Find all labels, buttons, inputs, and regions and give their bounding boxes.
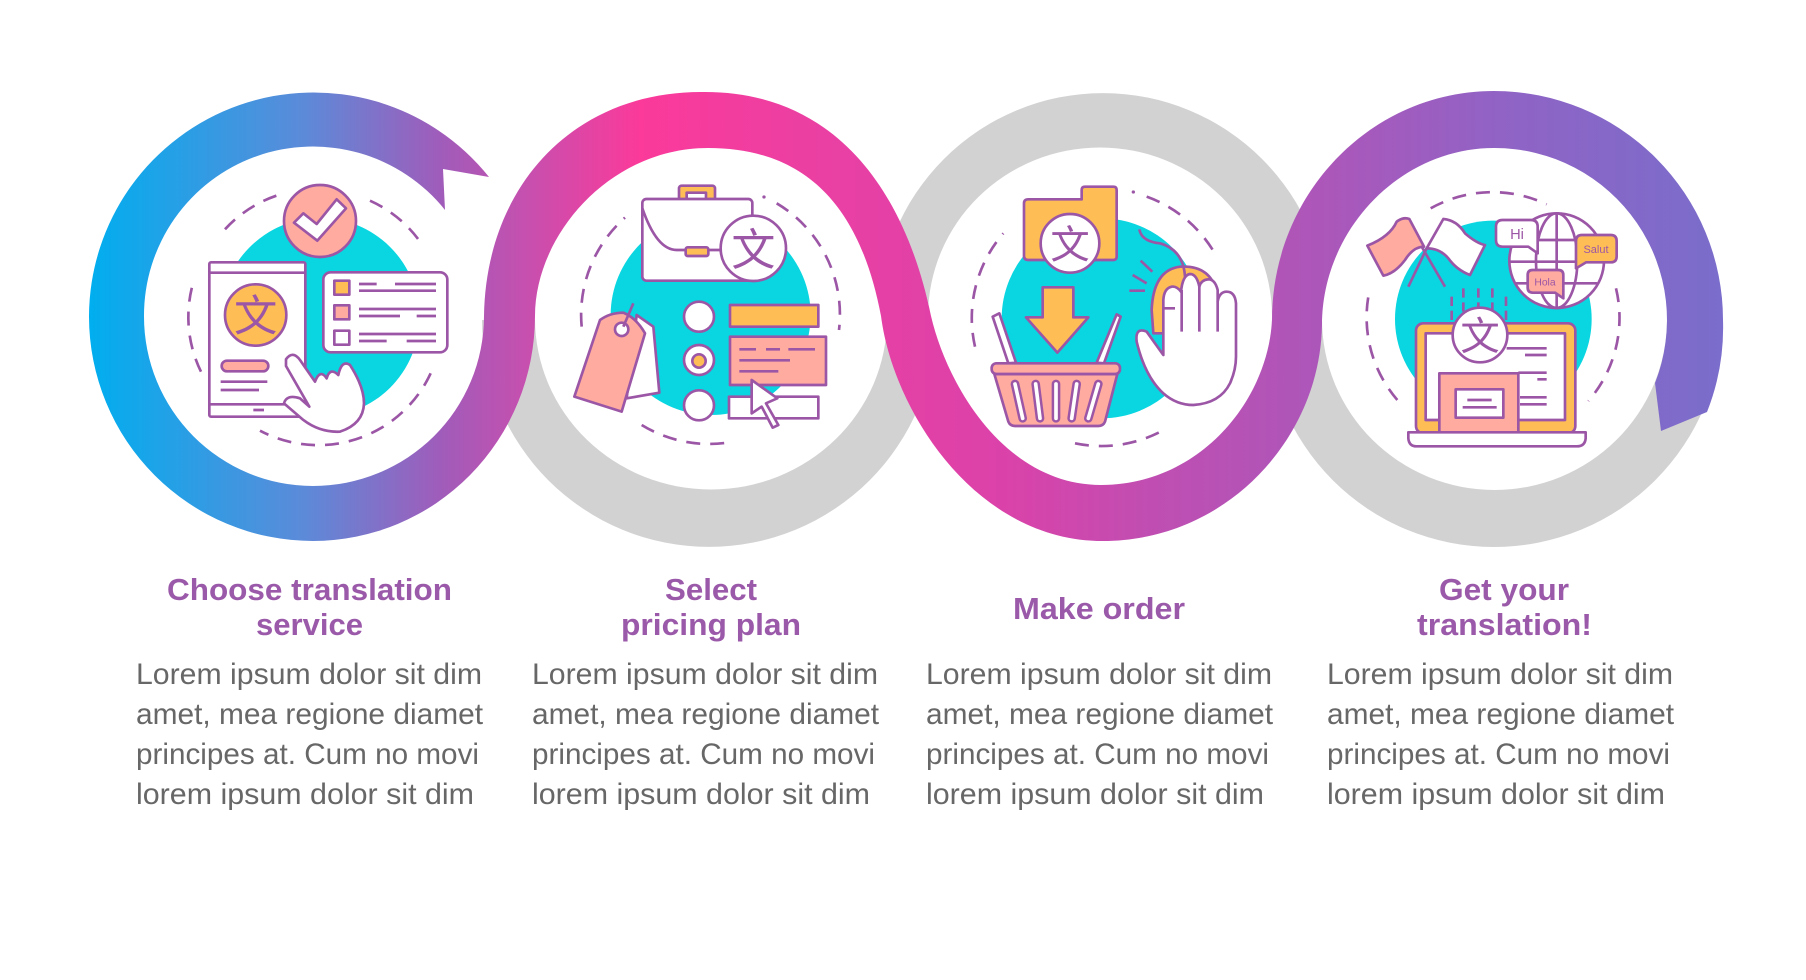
body: step 4: lorem ipsum dolor sit dim xyxy=(1327,778,1665,811)
heading: step 2 xyxy=(621,572,801,642)
heading: step 2: Select xyxy=(665,572,757,607)
body: step 2: lorem ipsum dolor sit dim xyxy=(532,778,870,811)
white centre: step 2 xyxy=(535,148,887,490)
text block: step 3 xyxy=(926,591,1274,811)
heading: step 1: Choose translation xyxy=(167,572,452,607)
ring diagram xyxy=(89,91,1723,547)
icon: choose translation service: 文 xyxy=(234,293,277,341)
heading: step 4: Get your xyxy=(1439,572,1569,607)
body: step 1: Lorem ipsum dolor sit dim xyxy=(136,658,482,691)
heading: step 4 xyxy=(1417,572,1592,642)
body: step 2: principes at. Cum no movi xyxy=(532,738,875,771)
body: step 1: principes at. Cum no movi xyxy=(136,738,479,771)
body: step 1: lorem ipsum dolor sit dim xyxy=(136,778,474,811)
body: step 2 xyxy=(532,658,880,811)
text block: step 1 xyxy=(136,572,484,811)
heading: step 2: pricing plan xyxy=(621,607,801,642)
heading: step 3: Make order xyxy=(1013,591,1185,626)
icon: get your translation: Salut xyxy=(1583,244,1609,256)
heading: step 4: translation! xyxy=(1417,607,1592,642)
text block: step 4 xyxy=(1327,572,1675,811)
heading: step 1: service xyxy=(256,607,363,642)
body: step 1: amet, mea regione diamet xyxy=(136,698,484,731)
icon: make order xyxy=(972,187,1236,446)
body: step 3: principes at. Cum no movi xyxy=(926,738,1269,771)
icon: make order: 文 xyxy=(1050,223,1090,267)
body: step 3: amet, mea regione diamet xyxy=(926,698,1274,731)
grey ring: step 4 xyxy=(1266,319,1722,547)
body: step 3 xyxy=(926,658,1274,811)
icon: get your translation: 文 xyxy=(1460,315,1500,359)
icon: get your translation: Hola xyxy=(1534,278,1556,289)
body: step 4 xyxy=(1327,658,1675,811)
grey ring: step 2 xyxy=(482,320,936,547)
white centre: step 1 xyxy=(144,148,482,486)
body: step 3: Lorem ipsum dolor sit dim xyxy=(926,658,1272,691)
icon: select pricing plan: 文 xyxy=(731,226,775,275)
body: step 4: Lorem ipsum dolor sit dim xyxy=(1327,658,1673,691)
body: step 3: lorem ipsum dolor sit dim xyxy=(926,778,1264,811)
grey ring: step 3 xyxy=(878,93,1328,318)
text block: step 2 xyxy=(532,572,880,811)
white centre: step 3 xyxy=(928,148,1272,486)
icon: get your translation: Hi xyxy=(1510,227,1524,243)
heading: step 1 xyxy=(167,572,452,642)
body: step 4: principes at. Cum no movi xyxy=(1327,738,1670,771)
white centre: step 4 xyxy=(1322,148,1667,490)
body: step 1 xyxy=(136,658,484,811)
body: step 2: amet, mea regione diamet xyxy=(532,698,880,731)
icon: select pricing plan xyxy=(574,186,840,444)
body: step 4: amet, mea regione diamet xyxy=(1327,698,1675,731)
icon: get your translation xyxy=(1367,192,1620,446)
icon: choose translation service xyxy=(188,185,447,445)
gradient ribbon arrow xyxy=(89,91,1723,541)
body: step 2: Lorem ipsum dolor sit dim xyxy=(532,658,878,691)
